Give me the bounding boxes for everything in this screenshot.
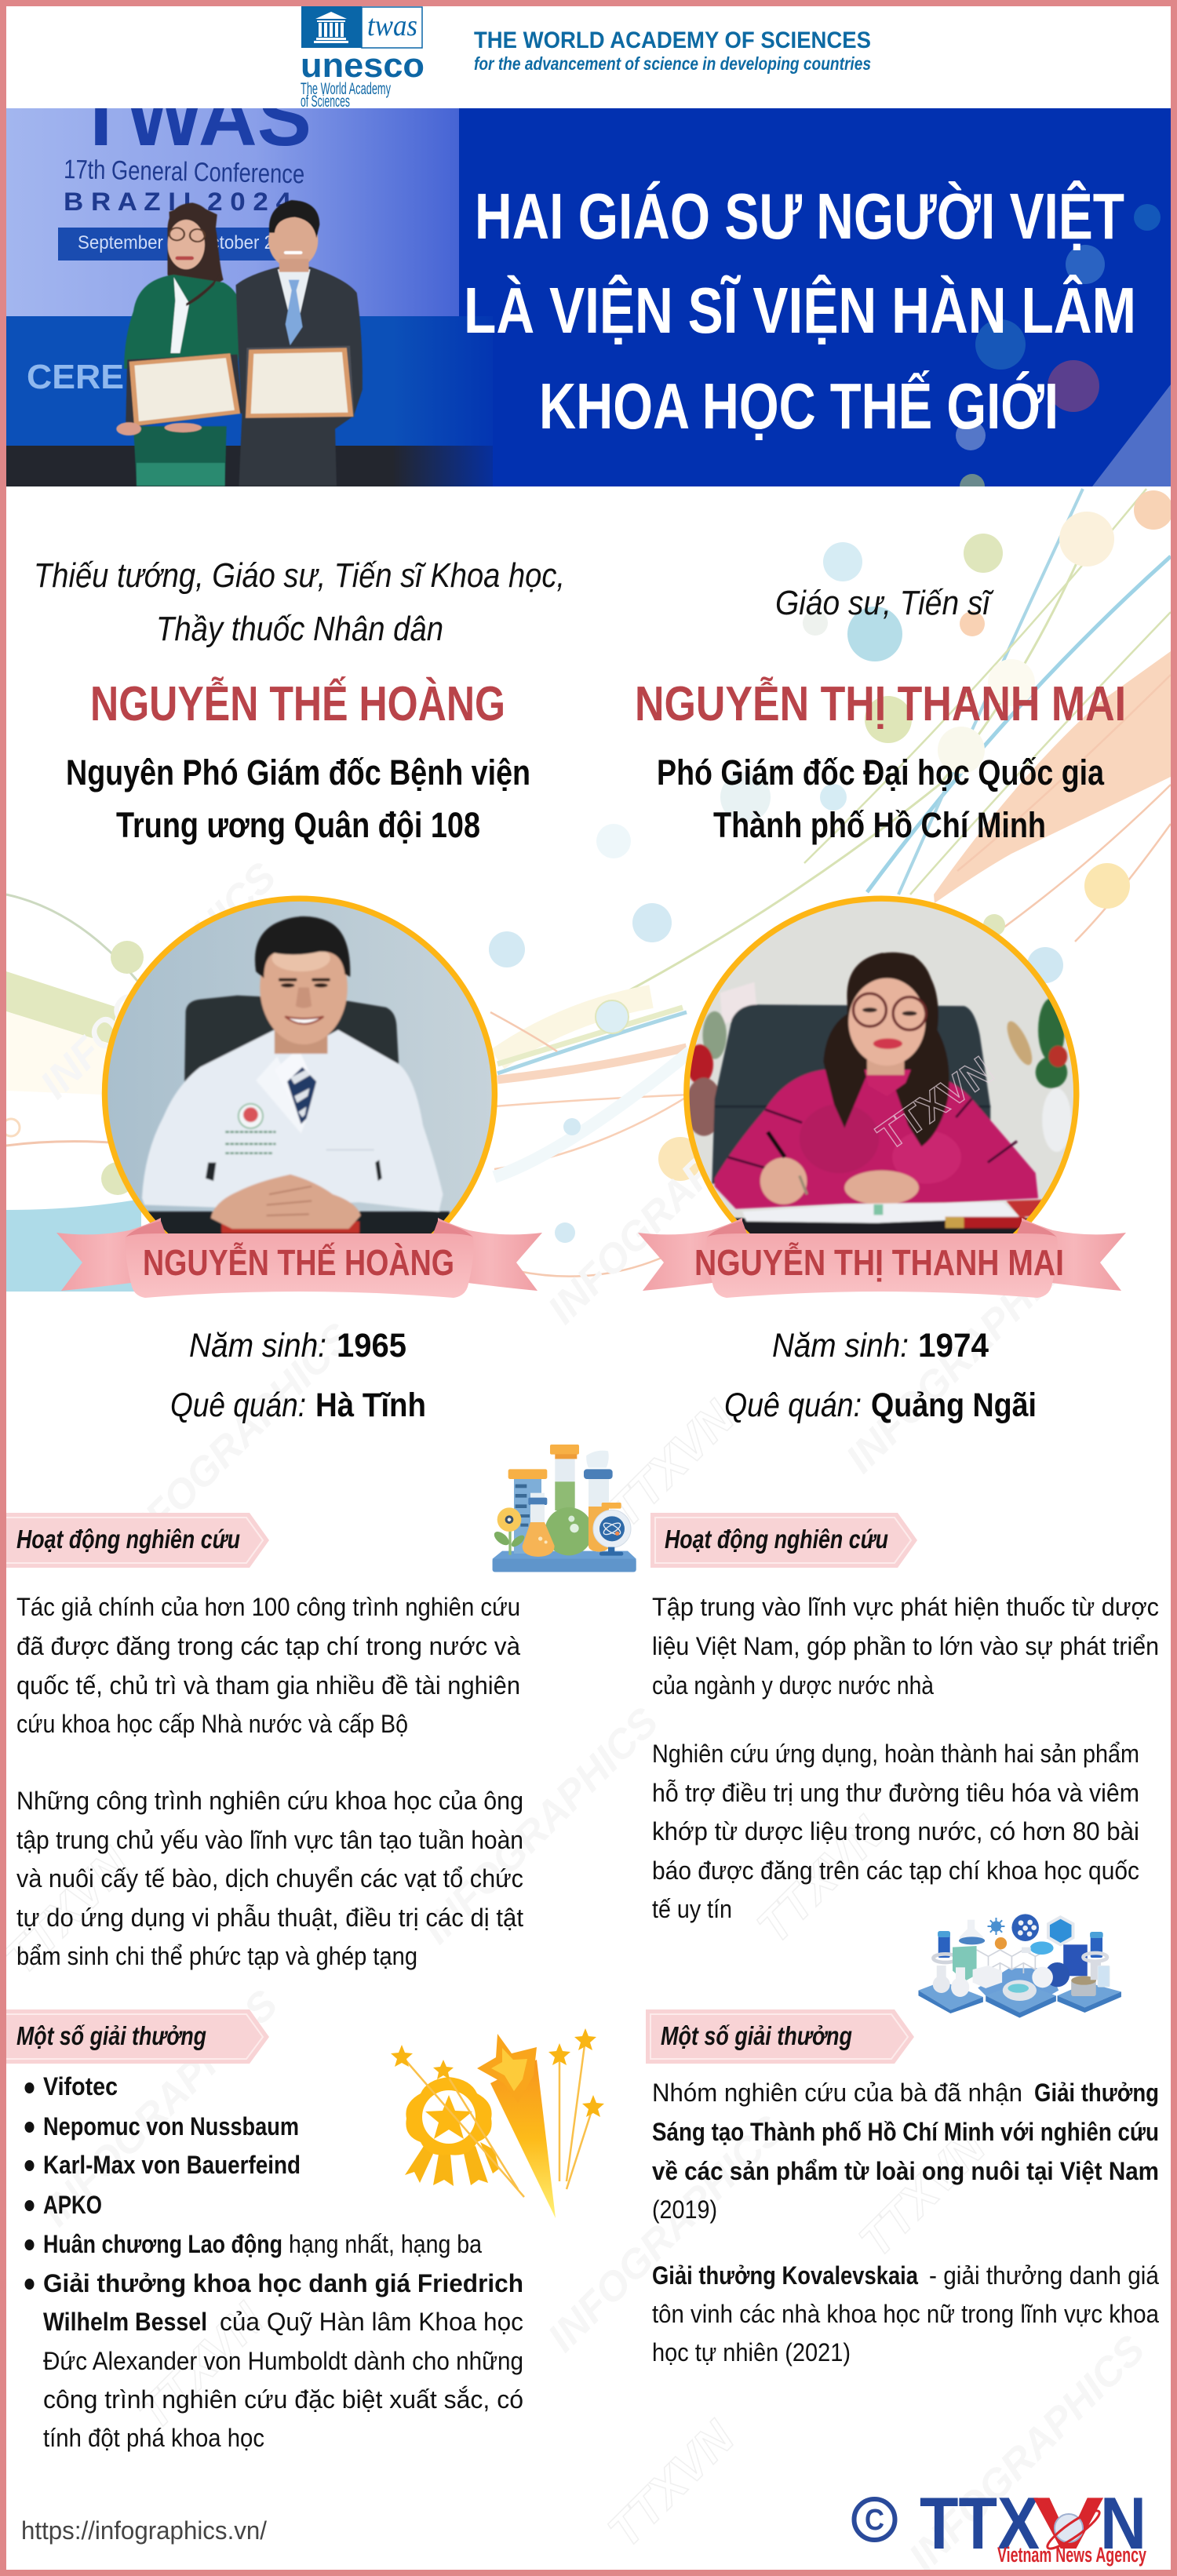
academic titles: Thiếu tướng, Giáo sư, Tiến sĩ Khoa học,: [34, 556, 565, 595]
watermarks: TTXVN: [747, 1806, 894, 1953]
title: [464, 180, 1136, 443]
list text: APKO: [43, 2191, 102, 2219]
text block: right research: của ngành y dược nước nhà: [652, 1671, 934, 1700]
birth details: right: Quê quán:: [724, 1386, 862, 1424]
heading: The World Academy of Sciences: THE WORLD ACADEMY OF SCIENCES: [474, 27, 871, 53]
hero photo: conference stage with two professors: CERE: [27, 358, 124, 396]
list text: của Quỹ Hàn lâm Khoa học: [220, 2308, 523, 2336]
logo: TTXVN: N: [1100, 2482, 1146, 2564]
panel: left professor headings: [34, 556, 565, 845]
position: Thành phố Hồ Chí Minh: [713, 805, 1046, 845]
list text: Nepomuc von Nussbaum: [43, 2112, 299, 2141]
ribbon name: NGUYỄN THỊ THANH MAI: [694, 1242, 1064, 1283]
text block: left research: Những công trình nghiên cứu khoa học của ông: [16, 1787, 523, 1815]
icon: laboratory flasks: [492, 1445, 636, 1572]
header logos: [301, 6, 871, 111]
academic titles: [34, 556, 565, 648]
list text: Giải thưởng khoa học danh giá Friedrich: [43, 2269, 523, 2297]
hero photo: conference stage with two professors: September 2 – October 2: [78, 232, 274, 253]
list text: công trình nghiên cứu đặc biệt xuất sắc, có: [43, 2385, 523, 2414]
section tag: left research: Hoạt động nghiên cứu: [16, 1525, 240, 1554]
text block: right awards: (2019): [652, 2195, 717, 2224]
birth details: right: 1974: [918, 1327, 989, 1365]
text block: right research: hỗ trợ điều trị ung thư đường tiêu hóa và viêm: [652, 1779, 1139, 1807]
text block: left research: [16, 1593, 523, 1970]
hero banner: [6, 108, 1171, 486]
list text: Huân chương Lao động: [43, 2230, 282, 2258]
text block: right research: Tập trung vào lĩnh vực phát hiện thuốc từ dược: [652, 1593, 1159, 1621]
text block: right awards: Giải thưởng Kovalevskaia: [652, 2261, 918, 2290]
logo: UNESCO TWAS mark: twas: [367, 9, 417, 42]
section tag: right research: Hoạt động nghiên cứu: [665, 1525, 888, 1554]
birth details: left: Năm sinh:: [189, 1327, 326, 1365]
watermarks: INFOGRAPHICS: [539, 1079, 793, 1332]
watermarks: INFOGRAPHICS: [414, 1699, 668, 1952]
logo: copyright mark: C: [865, 2504, 884, 2537]
section tag: right research: [650, 1513, 917, 1568]
watermarks: TTXVN: [127, 2293, 274, 2439]
list text: Wilhelm Bessel: [43, 2308, 207, 2336]
text block: left research: tự do ứng dụng vi phẫu thuật, điều trị các dị tật: [16, 1904, 523, 1932]
hero photo: conference stage with two professors: 17th General Conference: [64, 155, 305, 189]
academic titles: Giáo sư, Tiến sĩ: [775, 584, 994, 622]
portrait: Nguyễn Thế Hoàng: [102, 896, 497, 1233]
watermarks: TTXVN: [849, 2120, 996, 2267]
text block: left research: tập trung chủ yếu vào lĩnh vực tân tạo tuần hoàn: [16, 1826, 523, 1854]
section tag: right awards: [646, 2009, 914, 2064]
position: Nguyên Phó Giám đốc Bệnh viện: [66, 752, 530, 792]
icon: medal and shooting star: [391, 2028, 604, 2218]
text block: left research: bẩm sinh chi thể phức tạp và ghép tạng: [16, 1942, 417, 1970]
list text: Karl-Max von Bauerfeind: [43, 2151, 301, 2179]
section tag: right awards: Một số giải thưởng: [661, 2021, 852, 2050]
text block: right research: tế uy tín: [652, 1895, 732, 1923]
logo: UNESCO TWAS mark: of Sciences: [301, 93, 350, 111]
icon: molecular lab set: [918, 1914, 1121, 2018]
section tag: left research: [6, 1513, 269, 1568]
birth details: left: [170, 1327, 426, 1424]
birth details: left: Hà Tĩnh: [315, 1386, 426, 1424]
section tag: left awards: [6, 2009, 269, 2064]
list text: Đức Alexander von Humboldt dành cho những: [43, 2347, 523, 2375]
heading: The World Academy of Sciences: [474, 27, 871, 74]
watermarks: TTXVN: [598, 1390, 745, 1537]
birth details: right: Quảng Ngãi: [871, 1386, 1037, 1424]
watermarks: INFOGRAPHICS: [900, 2326, 1154, 2576]
award list: left: [25, 2072, 523, 2452]
hero photo: conference stage with two professors: [6, 108, 493, 486]
watermarks: INFOGRAPHICS: [539, 2107, 793, 2360]
ribbon: Nguyễn Thế Hoàng: [56, 1218, 542, 1298]
text block: left research: cứu khoa học cấp Nhà nước và cấp Bộ: [16, 1710, 408, 1738]
text block: left research: đã được đăng trong các tạp chí trong nước và: [16, 1632, 520, 1660]
text block: right awards: [652, 2079, 1159, 2366]
hero photo: conference stage with two professors: TWAS: [76, 72, 312, 163]
list bullets: [25, 2082, 35, 2290]
position: [66, 752, 530, 845]
birth details: left: 1965: [337, 1327, 406, 1365]
text block: right awards: Giải thưởng: [1034, 2079, 1159, 2107]
text block: right awards: học tự nhiên (2021): [652, 2338, 851, 2366]
position: [657, 752, 1105, 845]
logo: TTXVN: TTX: [920, 2482, 1040, 2564]
watermarks: [0, 854, 1154, 2576]
birth details: right: [724, 1327, 1037, 1424]
watermarks: TTXVN: [598, 2410, 745, 2557]
position: Trung ương Quân đội 108: [116, 805, 480, 845]
birth details: right: Năm sinh:: [772, 1327, 909, 1365]
panel: right professor headings: [635, 584, 1126, 845]
watermarks: INFOGRAPHICS: [31, 854, 286, 1107]
portrait: Nguyễn Thị Thanh Mai: [683, 896, 1080, 1233]
portrait: Nguyễn Thị Thanh Mai: TTXVN: [869, 1048, 1001, 1159]
text block: right research: báo được đăng trên các tạp chí khoa học quốc: [652, 1856, 1139, 1885]
source url: https://infographics.vn/: [21, 2516, 267, 2545]
text block: right awards: - giải thưởng danh giá: [929, 2261, 1159, 2290]
position: Phó Giám đốc Đại học Quốc gia: [657, 752, 1105, 792]
text block: right research: liệu Việt Nam, góp phần to lớn vào sự phát triển: [652, 1632, 1159, 1660]
logo: TTXVN: [920, 2482, 1146, 2567]
decorative background swirl and bubbles: [2, 489, 1173, 1292]
text block: right research: [652, 1593, 1159, 1923]
watermarks: INFOGRAPHICS: [33, 1981, 287, 2235]
logo: UNESCO TWAS mark: unesco: [301, 46, 425, 85]
list text: Vifotec: [43, 2072, 118, 2101]
academic titles: Thầy thuốc Nhân dân: [156, 610, 443, 648]
ribbon: Nguyễn Thị Thanh Mai: [638, 1218, 1126, 1298]
logo: TTXVN: V: [1033, 2482, 1104, 2564]
hero bubbles and corner shape: [956, 204, 1171, 499]
section tag: left awards: Một số giải thưởng: [16, 2021, 206, 2050]
text block: left research: Tác giả chính của hơn 100 công trình nghiên cứu: [16, 1593, 520, 1621]
text block: left research: và nuôi cấy tế bào, dịch chuyển các vạt tổ chức: [16, 1864, 523, 1893]
text block: right research: khớp từ dược liệu trong nước, có hơn 80 bài: [652, 1817, 1139, 1845]
text block: left research: quốc tế, chủ trì và tham gia nhiều đề tài nghiên: [16, 1671, 520, 1700]
list text: tính đột phá khoa học: [43, 2424, 264, 2452]
logo: copyright mark: [854, 2499, 895, 2540]
text block: right awards: Nhóm nghiên cứu của bà đã nhận: [652, 2079, 1022, 2107]
birth details: left: Quê quán:: [170, 1386, 306, 1424]
watermarks: INFOGRAPHICS: [837, 1228, 1091, 1481]
name: NGUYỄN THẾ HOÀNG: [90, 677, 505, 731]
list text: hạng nhất, hạng ba: [289, 2230, 482, 2258]
watermarks: INFOGRAPHICS: [107, 1314, 362, 1568]
list text: [43, 2072, 523, 2452]
ribbon name: NGUYỄN THẾ HOÀNG: [143, 1242, 454, 1283]
heading: The World Academy of Sciences: for the advancement of science in developing countries: [474, 53, 871, 74]
hero photo: conference stage with two professors: B R A Z I L 2 0 2 4: [64, 188, 291, 216]
logo: UNESCO TWAS mark: The World Academy: [301, 80, 391, 98]
logo: UNESCO TWAS mark: [301, 6, 425, 111]
